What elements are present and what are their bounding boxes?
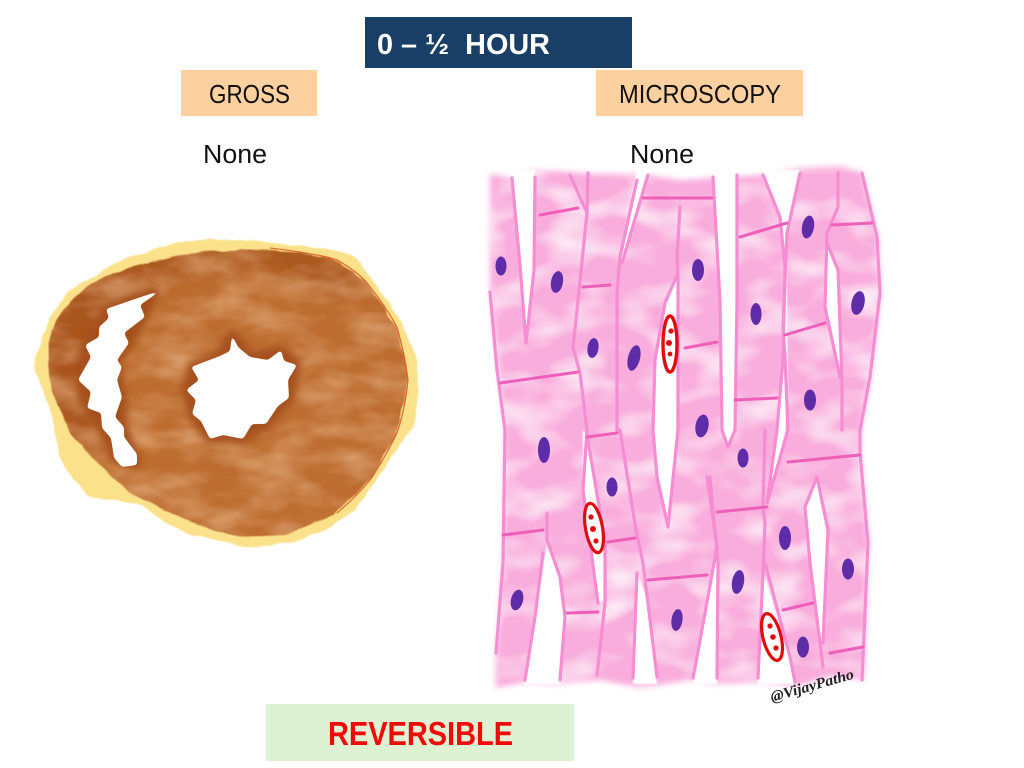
red blood cell in capillary, upper — [663, 316, 677, 372]
heading: microscopy: MICROSCOPY — [619, 79, 781, 109]
myocardium wall — [48, 248, 408, 538]
heading: microscopy — [596, 70, 803, 116]
watermark signature: @VijayPatho — [769, 667, 856, 706]
epicardial fat — [33, 240, 418, 548]
nuclei — [496, 215, 867, 658]
white gaps between fibres — [512, 170, 842, 684]
intercalated discs — [500, 198, 872, 653]
right ventricle lumen — [78, 290, 162, 467]
red blood cell in capillary, middle — [581, 502, 607, 554]
callout: reversible — [266, 704, 574, 761]
pink fibre bed — [490, 166, 881, 688]
heading: gross — [181, 70, 317, 116]
callout: reversible: REVERSIBLE — [328, 715, 513, 752]
heading: gross: GROSS — [209, 79, 290, 109]
text: gross finding: None — [203, 141, 267, 169]
dark endocardial halos — [80, 292, 295, 463]
illustration: gross heart cross-section — [30, 230, 430, 550]
wall outline — [270, 248, 408, 513]
illustration: cardiac muscle fibres — [490, 166, 881, 706]
fibre borders — [490, 173, 880, 682]
red blood cell in capillary, lower — [757, 612, 787, 662]
left ventricle lumen — [186, 335, 297, 439]
title banner: 0 to half hour — [365, 17, 632, 68]
title banner: 0 to half hour: 0 – ½ HOUR — [377, 29, 550, 61]
text: microscopy finding: None — [630, 141, 694, 169]
